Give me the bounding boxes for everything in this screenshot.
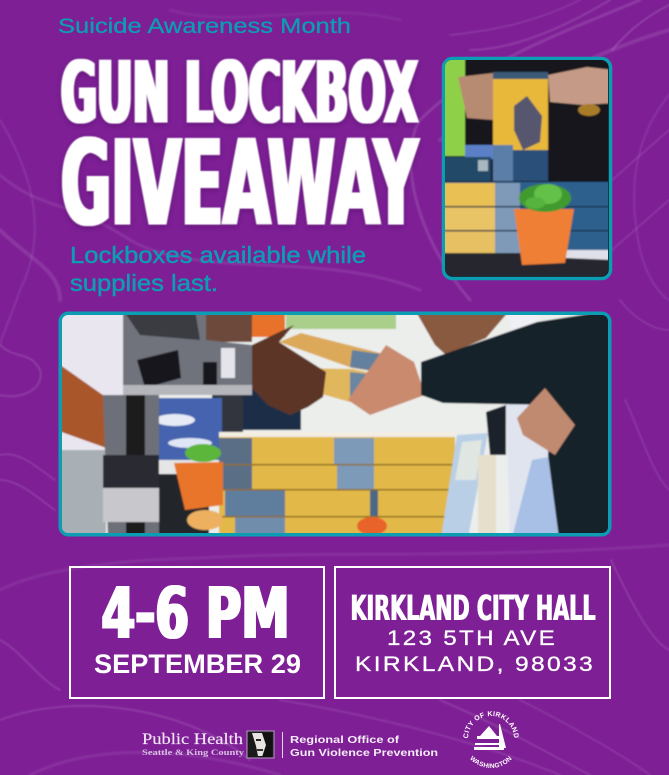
subheading: availability note: supplies last.	[70, 270, 218, 296]
subheading: availability note: Lockboxes available while	[70, 242, 366, 268]
photo: lockbox display with plant	[438, 54, 614, 282]
logo: Public Health: Public Health	[142, 731, 243, 748]
logo: Regional Office of Gun Violence Prevention: Regional Office of	[290, 734, 400, 746]
info box: time and date	[70, 567, 324, 698]
icon: portrait emblem	[247, 731, 274, 758]
logo: City of Kirkland seal	[463, 711, 519, 768]
logo: Regional Office of Gun Violence Prevention	[282, 732, 438, 759]
logo: City of Kirkland seal: CITY OF KIRKLAND	[463, 711, 519, 738]
street address: 123 5TH AVE	[387, 627, 557, 650]
logo: City of Kirkland seal: WASHINGTON	[470, 756, 512, 768]
logo: Public Health	[142, 731, 244, 757]
date: SEPTEMBER 29	[94, 649, 301, 679]
time: 4-6 PM	[102, 572, 290, 655]
subheading: availability note	[70, 242, 366, 296]
logo: Regional Office of Gun Violence Prevention: Gun Violence Prevention	[290, 747, 438, 759]
logo: Public Health: Seattle & King County	[142, 748, 244, 757]
city and zip: KIRKLAND, 98033	[355, 653, 595, 676]
title: Gun Lockbox Giveaway	[61, 44, 419, 254]
info box: location	[335, 567, 610, 698]
heading: Suicide Awareness Month: Suicide Awareness Month	[58, 15, 351, 38]
photo: lockbox handoff	[56, 310, 614, 538]
